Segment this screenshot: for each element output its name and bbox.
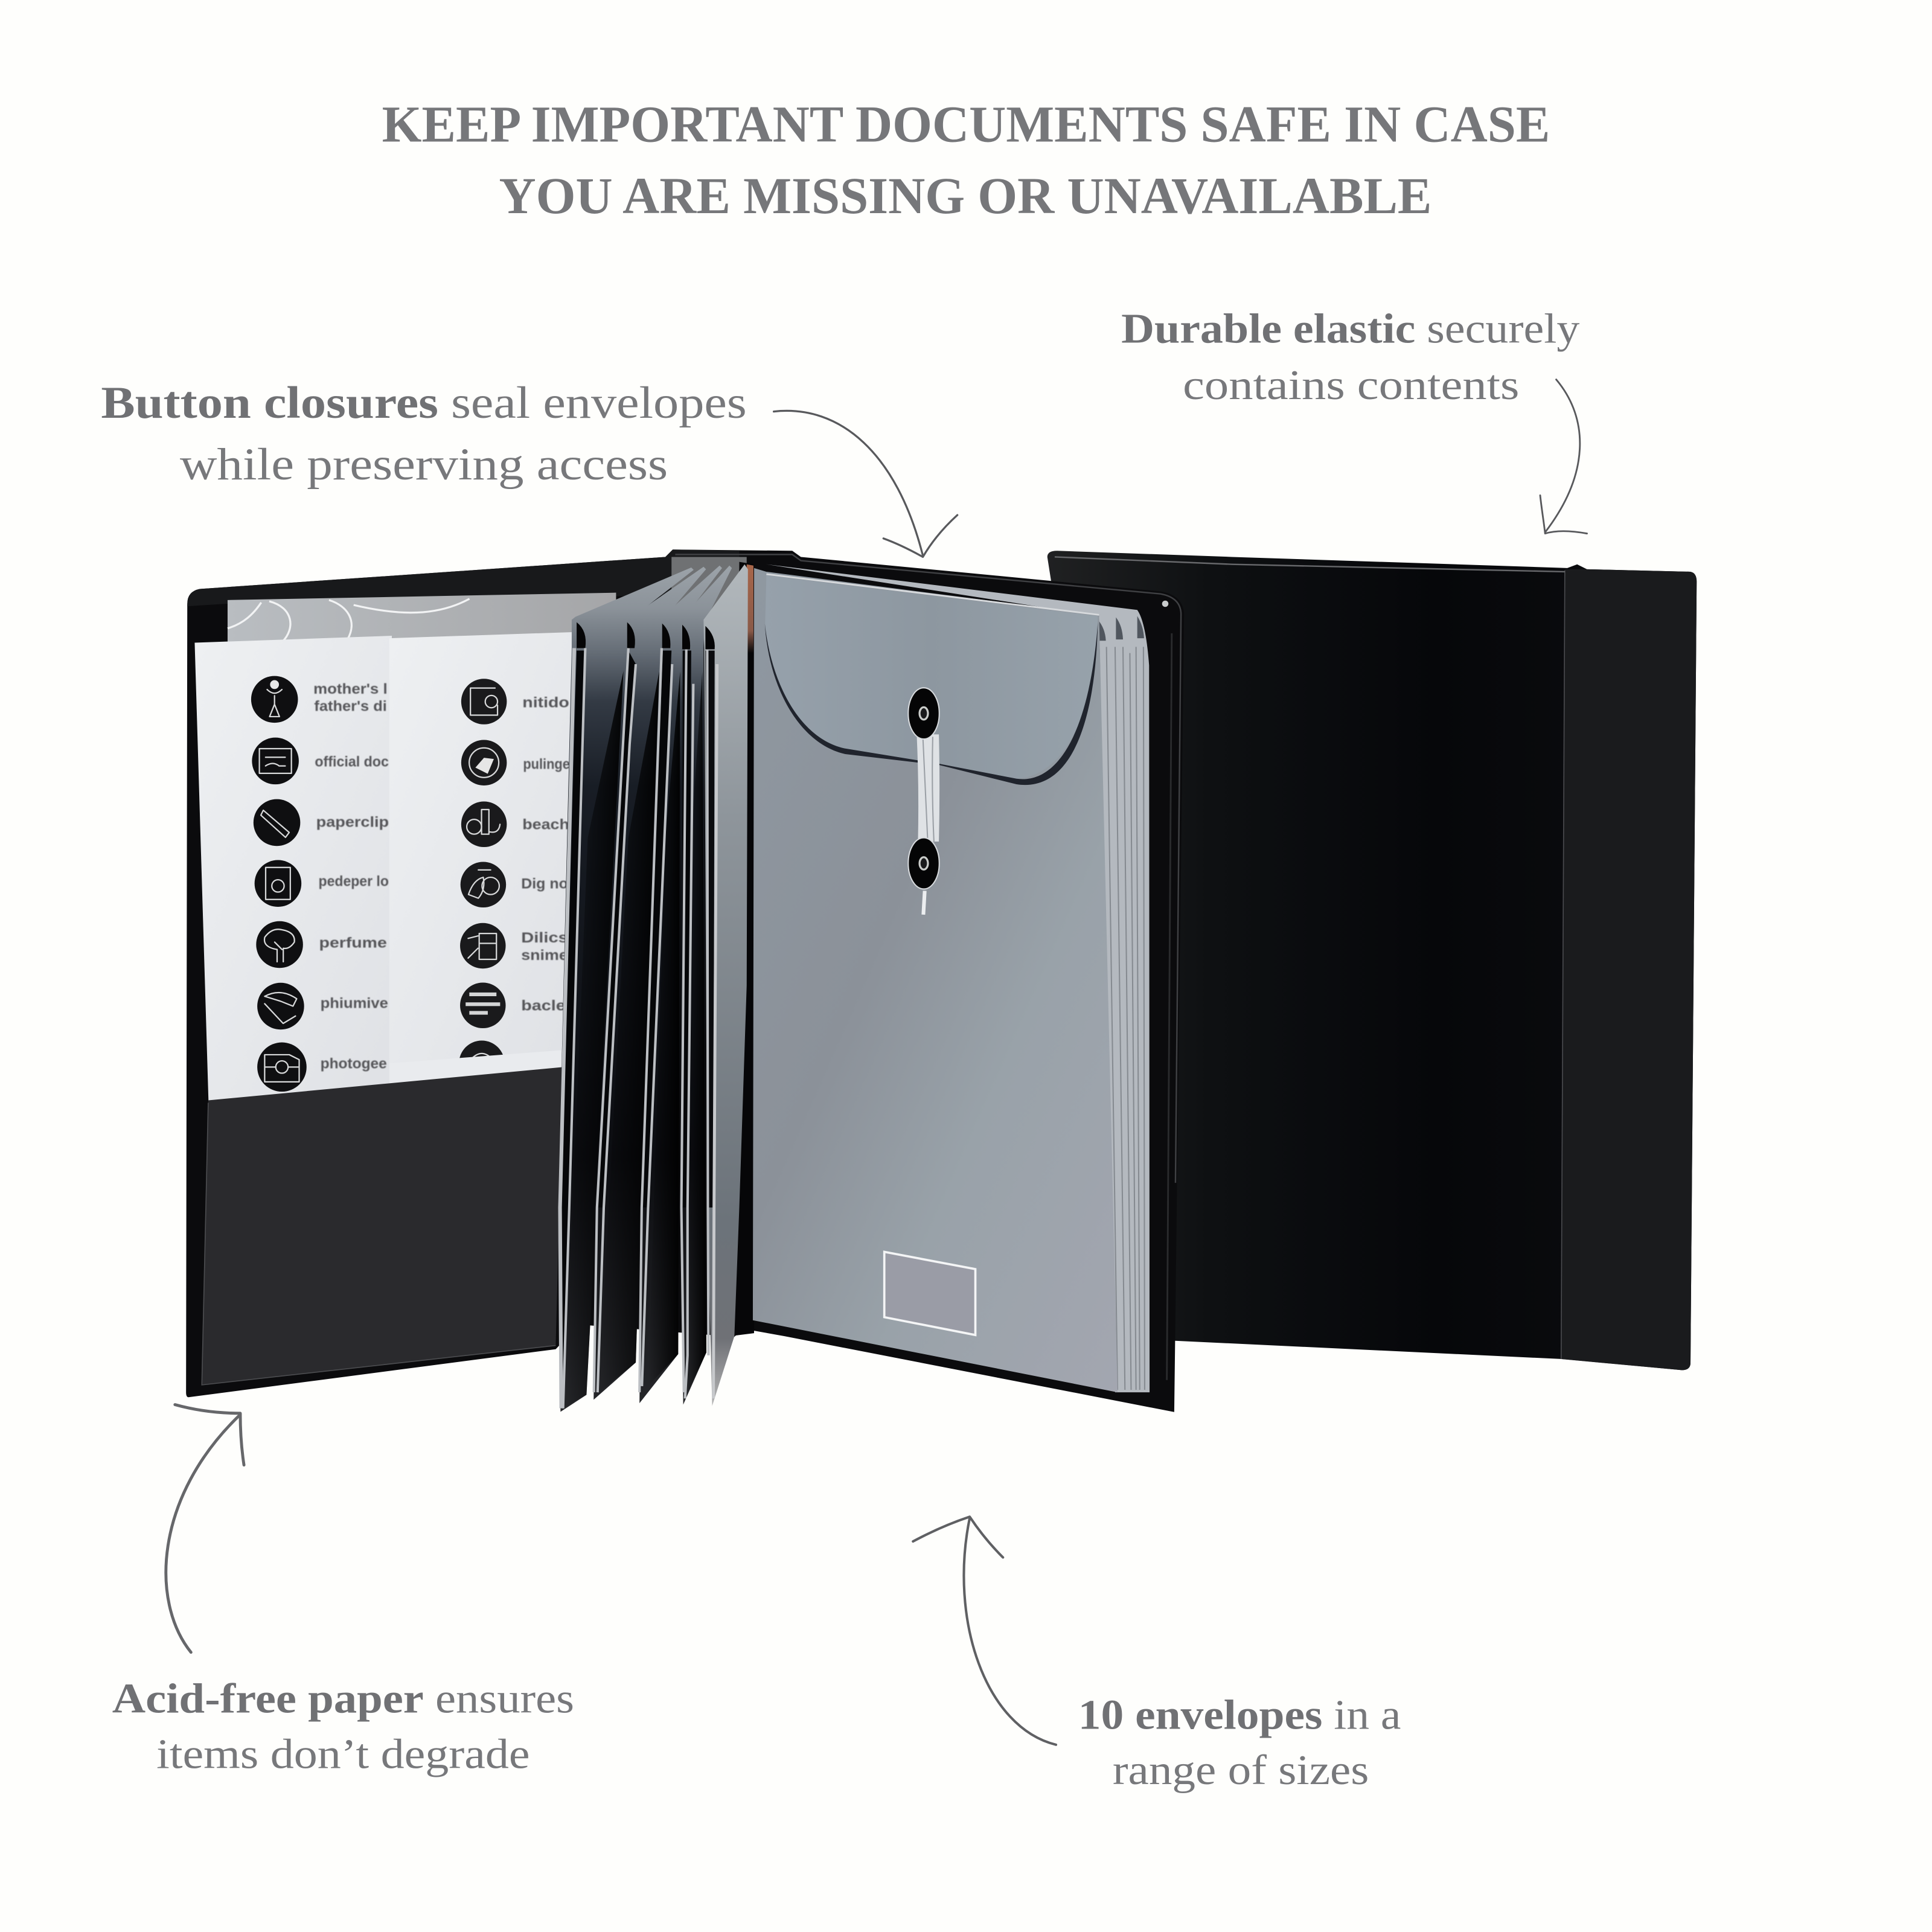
icon: beach [461,802,507,847]
gutter tint [747,565,753,653]
icon: paperclip [254,799,300,846]
arrow: 10 envelopes [913,1517,1056,1745]
page 3 [639,566,722,1403]
right sheet [389,632,573,1087]
string [916,734,939,915]
right labels: nitido [522,694,569,711]
envelope body [753,568,1118,1392]
gutter [734,562,754,1335]
elastic band [1561,569,1697,1370]
back tabs [1098,616,1144,641]
right labels [521,694,570,1014]
area behind page tops [671,557,747,616]
callout: durable elastic: Durable elastic securely [1121,305,1580,352]
closed folder [1048,551,1697,1370]
label box [884,1252,976,1335]
left labels: mother's l [313,681,388,697]
title [382,96,1550,225]
left sheet [194,636,392,1109]
icon: digital [461,862,506,907]
page 1 [558,568,694,1412]
back envelopes [766,565,1150,1392]
left labels: phiumive [321,995,388,1011]
page 5 [703,565,748,1406]
callout: durable elastic: contains contents [1183,362,1519,409]
left labels: father's di [314,699,387,715]
page 2 [593,567,706,1399]
icon: stripes [460,983,506,1028]
left labels: perfume [319,935,387,951]
cover [186,549,1184,1412]
upper button [908,688,939,739]
callout: 10 envelopes: range of sizes [1113,1747,1369,1794]
title: KEEP IMPORTANT DOCUMENTS SAFE IN CASE [382,96,1550,153]
open folder [186,549,1184,1412]
icon: tree [256,921,303,968]
lower sheet edge [389,1050,567,1089]
checklist right column [459,679,570,1086]
right labels: pulinge [523,756,570,772]
right labels: bacle [521,997,566,1014]
back layers [766,565,1150,1392]
icon: document [252,738,299,784]
right labels: beach [522,816,569,833]
pocket [202,1067,563,1385]
callout: durable elastic [1121,305,1580,409]
right labels: Dig no [521,875,568,892]
callout: button closures: while preserving access [180,440,668,490]
icon: photo [255,860,301,907]
icon: pet [461,740,507,785]
arrow: durable elastic [1540,380,1587,534]
inner map strip [228,593,616,647]
flap edge [765,622,1098,785]
left labels: official doc [315,753,389,770]
left labels: pedeper lo [319,873,389,889]
icon: camera [257,1043,307,1092]
envelope flap [765,575,1098,779]
divider pages [558,565,748,1412]
lower button [908,838,939,889]
icon: package [460,923,506,968]
callout: button closures [101,378,747,490]
page 4 [681,566,732,1405]
callout: 10 envelopes [1078,1692,1401,1794]
folder cover [1048,551,1697,1370]
callout: 10 envelopes: 10 envelopes in a [1078,1692,1401,1738]
callout: acid-free paper: items don’t degrade [156,1732,530,1778]
left labels: photogee [321,1055,387,1072]
callout: button closures: Button closures seal envelopes [101,378,747,428]
arrow: acid-free paper [166,1405,244,1652]
icon: partial [459,1040,505,1086]
left labels: paperclip [316,814,389,830]
title: YOU ARE MISSING OR UNAVAILABLE [499,167,1431,225]
left labels [313,681,389,1072]
callout: acid-free paper [112,1676,574,1778]
front envelope [753,568,1118,1392]
right labels: Dilics [521,930,568,946]
icon: hand [257,983,304,1029]
icon: flowers [251,676,298,723]
right labels: snime [521,947,568,964]
arrow: button closures [774,411,958,557]
icon: seal document [461,679,507,724]
callout: acid-free paper: Acid-free paper ensures [112,1676,574,1722]
checklist left column [251,676,389,1092]
